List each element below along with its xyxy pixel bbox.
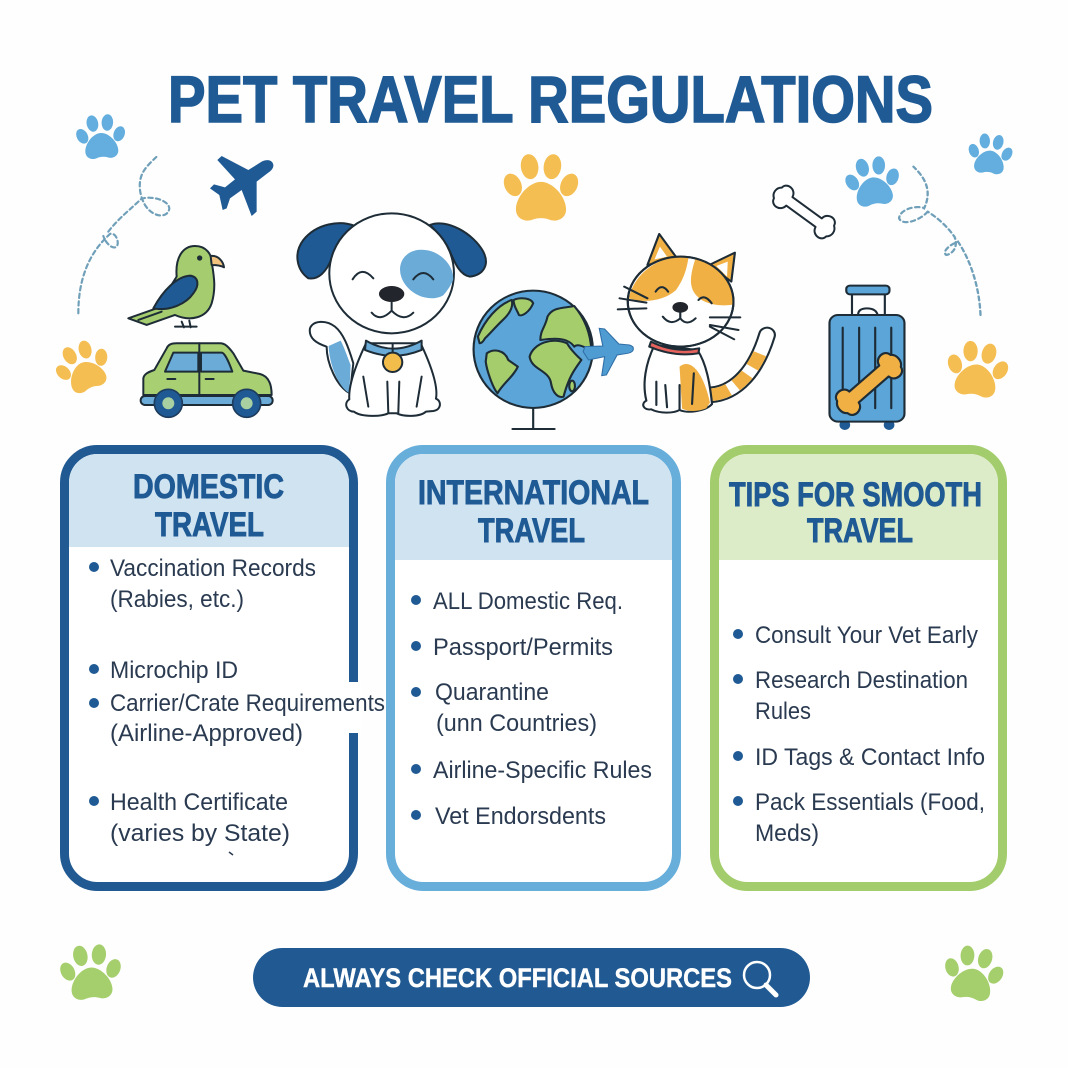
heading: domestic travel: TRAVEL [155,506,264,544]
heading: tips for smooth travel: TIPS FOR SMOOTH [729,476,982,514]
list: travel tips: ID Tags & Contact Info [755,744,985,771]
heading: international travel: TRAVEL [478,512,585,550]
list: domestic requirements: (varies by State) [110,820,290,847]
heading: tips for smooth travel: TRAVEL [807,512,913,550]
heading: tips for smooth travel [729,476,982,550]
heading: international travel: INTERNATIONAL [418,474,649,512]
flight path left [78,157,169,313]
list: international requirements: (unn Countries) [436,710,597,737]
icon: airplane [210,156,273,216]
icon: globe with plane [474,291,633,429]
list: international requirements: Passport/Permits [433,634,613,661]
icon: cat [618,234,767,413]
panel: tips for smooth travel [714,450,1002,886]
icon: orange paw centre [500,153,582,221]
icon: bone [768,181,840,243]
flight path right [899,167,981,315]
icon: suitcase [829,286,908,430]
list: international requirements: Quarantine [435,679,549,706]
panel: domestic travel [64,450,385,886]
icon: dog [297,213,486,416]
list: domestic requirements: (Airline-Approved) [110,720,303,747]
icon: bird [128,246,224,327]
list: international requirements: Airline-Specific Rules [433,757,652,784]
list: travel tips [733,622,985,847]
icon: magnifier [744,962,776,995]
banner: always check official sources [253,948,810,1007]
icon: orange paw right [941,337,1014,401]
icon: blue paw right [840,153,905,209]
list: travel tips: Consult Your Vet Early [755,622,978,649]
heading: domestic travel: DOMESTIC [133,468,284,506]
heading: domestic travel [133,468,284,544]
icon: green paw bottom left [56,942,126,1001]
list: travel tips: Rules [755,698,811,725]
banner text: ALWAYS CHECK OFFICIAL SOURCES [303,963,732,993]
list: domestic requirements: (Rabies, etc.) [110,586,244,613]
panel header: international [395,454,672,560]
list: travel tips: Meds) [755,820,819,847]
list: travel tips: Pack Essentials (Food, [755,789,985,816]
list: domestic requirements: Health Certificate [110,789,288,816]
list: travel tips: Research Destination [755,667,968,694]
icon: orange paw left [46,333,119,400]
list: domestic requirements: Carrier/Crate Requirements [110,690,385,717]
icon: blue paw top right [964,131,1016,176]
title: PET TRAVEL REGULATIONS [168,62,933,136]
heading: international travel [418,474,649,550]
list: international requirements [411,588,652,830]
icon: blue paw top left [73,112,129,160]
list: domestic requirements: Vaccination Records [110,555,316,582]
list: international requirements: ALL Domestic Req. [433,588,623,615]
list: domestic requirements [89,555,385,855]
panel: international travel [390,450,676,886]
icon: green paw bottom right [937,941,1010,1005]
panel header: tips [719,454,998,560]
icon: car [141,343,273,417]
panel header: domestic [69,454,349,547]
list: international requirements: Vet Endorsdents [435,803,606,830]
list: domestic requirements: Microchip ID [110,657,238,684]
